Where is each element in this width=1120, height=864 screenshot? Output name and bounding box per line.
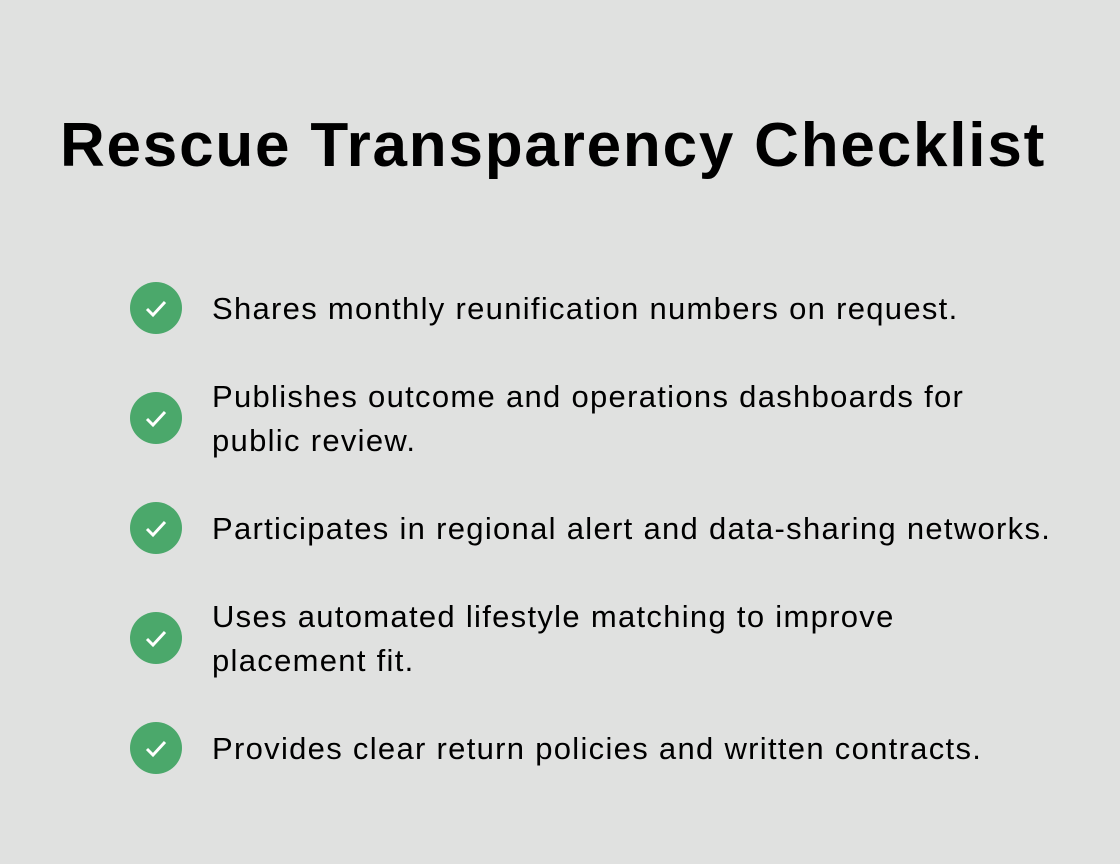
item 1 — [130, 282, 958, 334]
item 4 — [130, 599, 895, 678]
item 2: public review. — [212, 423, 416, 458]
icon: check — [130, 722, 182, 774]
icon: check — [130, 392, 182, 444]
icon: check — [130, 612, 182, 664]
item 1: Shares monthly reunification numbers on request. — [212, 291, 958, 326]
title: Rescue Transparency Checklist — [60, 111, 1046, 180]
item 2: Publishes outcome and operations dashboards for — [212, 379, 964, 414]
item 3: Participates in regional alert and data-sharing networks. — [212, 511, 1051, 546]
icon: check — [130, 282, 182, 334]
item 5 — [130, 722, 982, 774]
item 2 — [130, 379, 964, 458]
item 4: placement fit. — [212, 643, 415, 678]
item 3 — [130, 502, 1051, 554]
item 4: Uses automated lifestyle matching to improve — [212, 599, 895, 634]
item 5: Provides clear return policies and written contracts. — [212, 731, 982, 766]
icon: check — [130, 502, 182, 554]
